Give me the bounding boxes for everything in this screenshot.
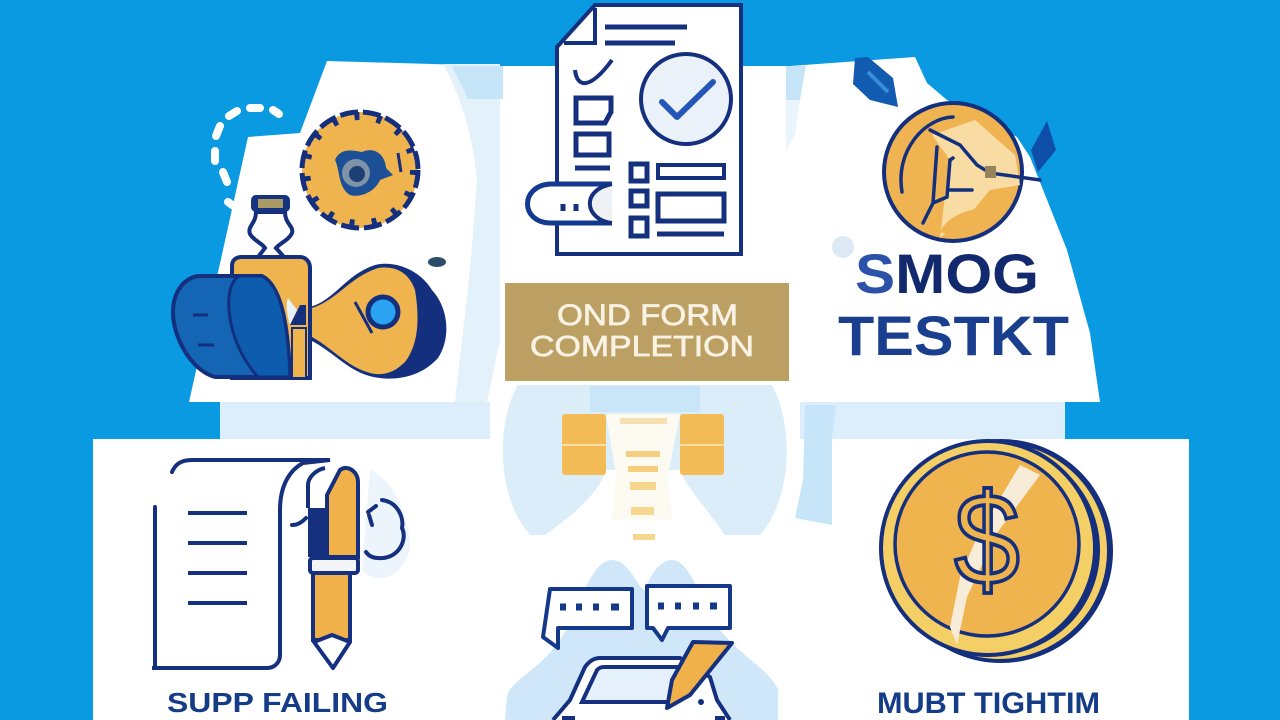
icon: paper and pen (152, 460, 404, 668)
label: form completion: OND FORM (557, 299, 738, 332)
icon: dashed circle (215, 108, 279, 207)
icon: car with pencil (553, 642, 732, 720)
heading: smog ticket: SMOG (855, 242, 1039, 305)
icon: dollar coin: $ (954, 468, 1020, 612)
icon: dollar coin (881, 439, 1113, 663)
label: form completion (505, 283, 789, 381)
icon: gear (302, 112, 418, 228)
heading: smog ticket: TESTKT (838, 304, 1069, 367)
icon: gold medallion (884, 103, 1040, 241)
icon: person with machine (173, 195, 446, 379)
icon: speech bubbles (543, 586, 730, 648)
icon: road bridge (562, 414, 724, 537)
icon: checklist document (528, 5, 741, 254)
caption: supp failing: SUPP FAILING (167, 687, 388, 718)
icon: leaves (853, 57, 1056, 172)
panel: white background shape (93, 57, 1189, 720)
label: form completion: COMPLETION (530, 331, 754, 363)
caption: must tighten: MUBT TIGHTIM (877, 687, 1100, 720)
heading: smog ticket (838, 242, 1069, 367)
